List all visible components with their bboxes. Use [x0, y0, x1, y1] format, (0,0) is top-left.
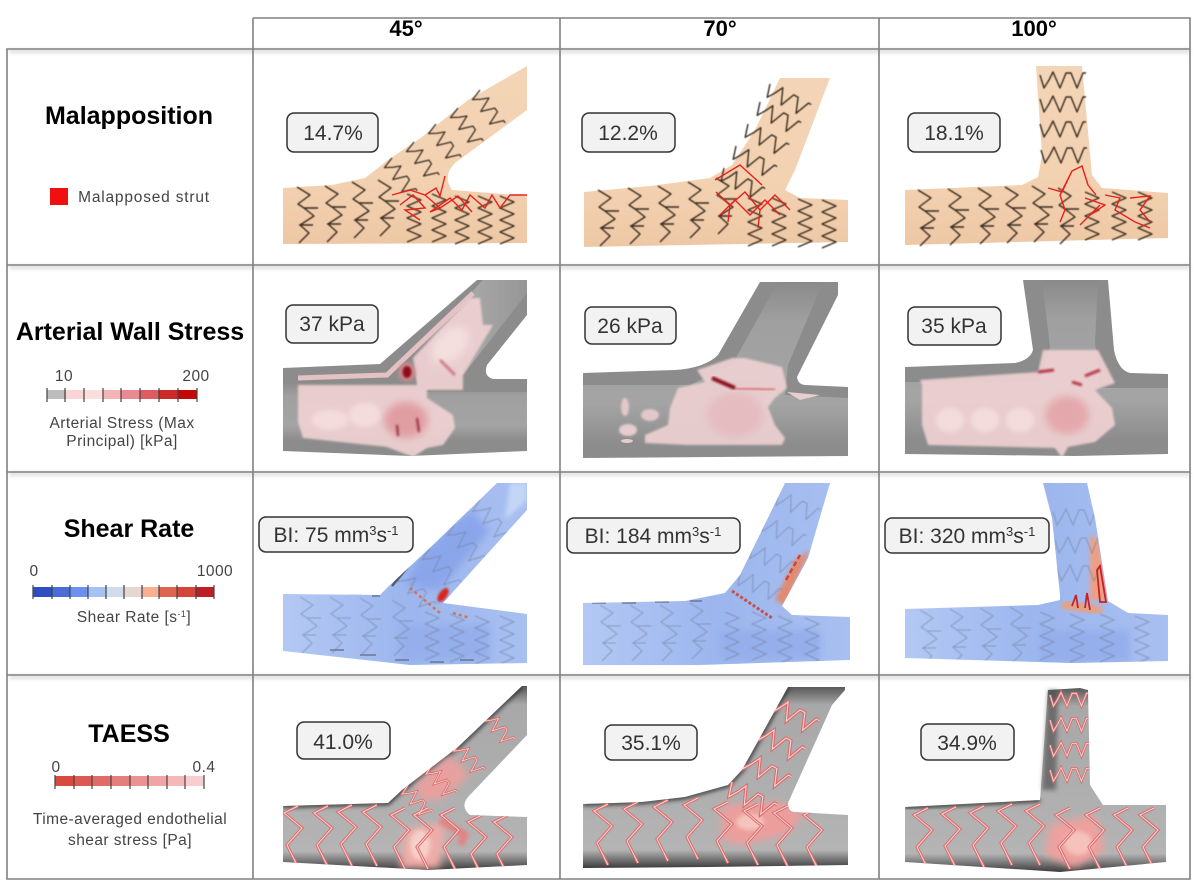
heading: Malapposition: Malapposition — [45, 102, 213, 130]
legend: shear rate colour scale: ] — [186, 609, 191, 626]
column heading: 70 degrees: 70° — [703, 16, 737, 41]
value label: BI 320 — [885, 518, 1049, 553]
heading: Arterial Wall Stress: Arterial Wall Stress — [16, 318, 244, 346]
column heading: 100 degrees: 100° — [1011, 16, 1057, 41]
legend: TAESS colour scale: 0.4 — [193, 759, 215, 776]
legend: arterial stress colour scale: Arterial Stress (Max — [49, 415, 195, 432]
value label: 18.1%: 18.1% — [924, 122, 984, 145]
legend: TAESS colour scale: shear stress [Pa] — [68, 832, 192, 849]
value label: BI 320: 3 — [1006, 524, 1013, 539]
panel: arterial wall stress 45 degrees — [283, 280, 527, 457]
heading: Shear Rate: Shear Rate — [64, 515, 194, 543]
legend: shear rate colour scale: 1000 — [197, 563, 233, 580]
value label: BI 184: 3 — [692, 524, 699, 539]
value label: 18.1% — [908, 113, 1000, 152]
value label: 26 kPa — [585, 307, 676, 344]
value label: BI 75: s — [376, 524, 387, 547]
value label: 41.0%: 41.0% — [313, 731, 373, 754]
legend: arterial stress colour scale: 10 — [55, 368, 73, 385]
value label: BI 184 — [567, 518, 740, 553]
panel: TAESS 70 degrees — [583, 687, 848, 869]
heading: TAESS: TAESS — [88, 720, 170, 748]
value label: 34.9% — [921, 724, 1014, 760]
panel: arterial wall stress 100 degrees — [905, 280, 1168, 458]
value label: 26 kPa: 26 kPa — [597, 315, 663, 338]
legend: arterial stress colour scale: 200 — [182, 368, 210, 385]
value label: BI 320: s — [1013, 525, 1024, 548]
value label: BI 75: BI: 75 mm — [274, 524, 369, 547]
value label: 35.1% — [605, 725, 697, 760]
value label: 35 kPa — [908, 307, 1001, 345]
legend: shear rate colour scale — [29, 563, 233, 626]
vessel and shear map — [905, 483, 1168, 666]
panel: TAESS 45 degrees — [283, 686, 527, 876]
panel: malapposition 100 degrees — [905, 66, 1168, 246]
row panel: malapposition label and legend — [45, 102, 213, 206]
value label: 14.7%: 14.7% — [303, 122, 363, 145]
value label: 12.2%: 12.2% — [598, 122, 658, 145]
vessel and stent — [905, 66, 1168, 246]
legend: shear rate colour scale: -1 — [177, 609, 186, 619]
panel: arterial wall stress 70 degrees — [583, 282, 848, 458]
panel: shear rate 45 degrees — [259, 483, 527, 665]
vessel and TAESS map — [283, 686, 527, 876]
value label: 34.9%: 34.9% — [937, 732, 997, 755]
value label: BI 184: -1 — [710, 524, 721, 539]
value label: BI 184: s — [699, 525, 710, 548]
vessel and stress map — [283, 280, 527, 457]
row panel: arterial wall stress label and legend — [16, 318, 244, 450]
vessel and TAESS map — [583, 687, 848, 869]
vessel and shear map — [283, 483, 527, 665]
row panel: TAESS label and legend — [33, 720, 227, 849]
vessel and stent — [584, 78, 848, 248]
value label: BI 75: -1 — [387, 523, 398, 538]
legend: TAESS colour scale — [33, 759, 227, 849]
legend: arterial stress colour scale: Principal) [kPa] — [66, 433, 178, 450]
vessel and stress map — [905, 280, 1168, 458]
legend: TAESS colour scale: 0 — [51, 759, 61, 776]
panel: TAESS 100 degrees — [905, 688, 1166, 872]
value label: 35 kPa: 35 kPa — [921, 315, 987, 338]
value label: BI 320: -1 — [1024, 524, 1035, 539]
value label: BI 75 — [259, 517, 413, 552]
value label: 37 kPa: 37 kPa — [299, 313, 365, 336]
vessel and stress map — [583, 282, 848, 458]
column heading: 45 degrees: 45° — [389, 16, 423, 41]
value label: BI 184: BI: 184 mm — [585, 525, 692, 548]
vessel and shear map — [583, 483, 850, 666]
value label: 12.2% — [582, 113, 675, 152]
value label: 35.1%: 35.1% — [621, 732, 681, 755]
vessel and TAESS map — [905, 688, 1166, 872]
panel: malapposition 45 degrees — [283, 66, 527, 244]
value label: 14.7% — [287, 113, 378, 152]
value label: 37 kPa — [286, 305, 378, 343]
panel: shear rate 100 degrees — [885, 483, 1168, 666]
value label: BI 320: BI: 320 mm — [899, 525, 1006, 548]
value label: BI 75: 3 — [369, 523, 376, 538]
legend: TAESS colour scale: Time-averaged endothelial — [33, 811, 227, 828]
panel: malapposition 70 degrees — [582, 78, 848, 248]
legend: arterial stress colour scale — [47, 368, 210, 450]
legend: shear rate colour scale: 0 — [29, 563, 39, 580]
row panel: shear rate label and legend — [29, 515, 233, 626]
panel: shear rate 70 degrees — [567, 483, 850, 666]
vessel and stent — [283, 66, 527, 244]
value label: 41.0% — [297, 722, 390, 759]
legend: malapposed strut: Malapposed strut — [78, 189, 210, 206]
legend: shear rate colour scale: Shear Rate [s — [77, 609, 177, 626]
